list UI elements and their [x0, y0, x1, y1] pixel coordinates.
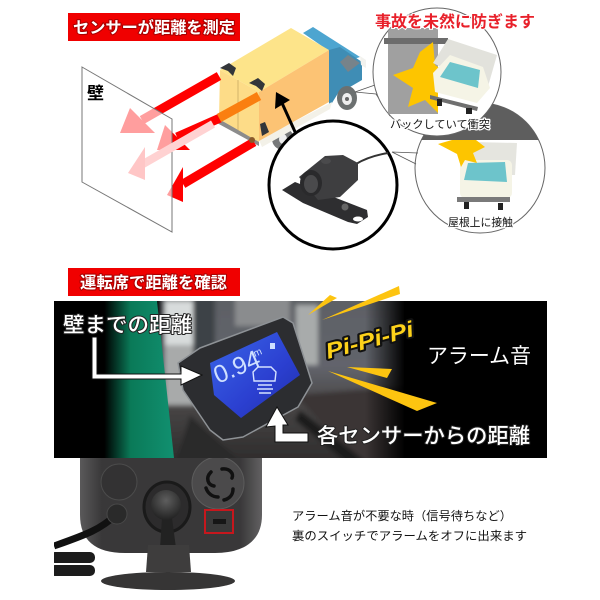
monitor screen: [209, 332, 300, 418]
heading: sensor measures distance: [68, 13, 240, 41]
icon: sensors on truck: [220, 63, 269, 143]
switch highlight: [205, 510, 233, 533]
callout: reversing collision: [373, 8, 501, 136]
heading: confirm distance from driver seat: 運転席で距離を確認: [80, 273, 227, 292]
truck cab: [303, 27, 366, 104]
panel: monitor photo: [54, 301, 547, 458]
wall: [82, 67, 172, 232]
arrow: to distance reading: [92, 337, 202, 385]
heading: confirm distance from driver seat: [68, 268, 240, 296]
button: [101, 464, 137, 500]
callout: sensor closeup: [269, 121, 397, 249]
truck chassis: [259, 102, 332, 147]
arrow: upper distance beam: [120, 76, 219, 133]
truck front: [460, 160, 512, 198]
ball mount: [144, 482, 190, 548]
impact star: [393, 42, 438, 113]
arrow: middle distance beam: [157, 96, 259, 150]
car icon: [253, 367, 276, 393]
cable: [54, 514, 117, 546]
label: distance to wall: 壁までの距離: [63, 314, 192, 337]
sensor cable: [356, 153, 388, 164]
cargo box rear: [219, 70, 259, 142]
label: Pi-Pi-Pi: Pi-Pi-Pi: [323, 316, 417, 364]
rear body: [80, 458, 262, 553]
sensor body: [299, 155, 358, 200]
truck box: [473, 142, 517, 175]
callout: roof collision: [392, 100, 550, 233]
label: alarm sound: アラーム音: [427, 345, 531, 368]
text: alarm switch note: アラーム音が不要な時（信号待ちなど）: [292, 508, 512, 523]
cargo box side: [259, 50, 329, 141]
stand: [101, 545, 235, 590]
speaker: [192, 457, 244, 509]
speaker symbol: [270, 343, 275, 349]
text: alarm switch note: [292, 508, 527, 543]
photo: monitor rear: [50, 457, 262, 590]
wheel: rear: [272, 128, 294, 150]
impact star: [438, 140, 485, 167]
text: alarm switch note: 裏のスイッチでアラームをオフに出来ます: [292, 529, 527, 543]
wall label: 壁: [87, 84, 104, 103]
distance reading: 0.94: [209, 345, 265, 390]
wheel: front: [337, 86, 357, 110]
caption: 屋根上に接触: [448, 215, 513, 229]
green pillar: [106, 301, 174, 458]
arrow: distance beam reflection: [128, 124, 213, 180]
truck front: [433, 55, 490, 103]
heading: accidents prevented: 事故を未然に防ぎます: [375, 12, 535, 31]
unit: m: [252, 346, 264, 360]
photo background: [157, 301, 402, 458]
label: distance from each sensor: 各センサーからの距離: [317, 425, 530, 448]
sensor bracket: [282, 182, 368, 224]
arrow: lower distance beam: [167, 142, 254, 202]
callout tails: [355, 85, 390, 116]
right fade: [365, 301, 405, 458]
cargo box top: [220, 28, 329, 92]
arrow: points to truck side: [275, 92, 296, 134]
monitor housing: [178, 317, 312, 440]
truck box: [433, 39, 497, 84]
arrow: to sensor distances: [266, 407, 308, 442]
wall obstacle: [388, 28, 438, 114]
caption: バックしていて衝突: [390, 117, 490, 131]
icon: alarm rays: [308, 286, 437, 411]
illustration: truck: [217, 27, 366, 150]
heading: sensor measures distance: センサーが距離を測定: [73, 18, 235, 37]
